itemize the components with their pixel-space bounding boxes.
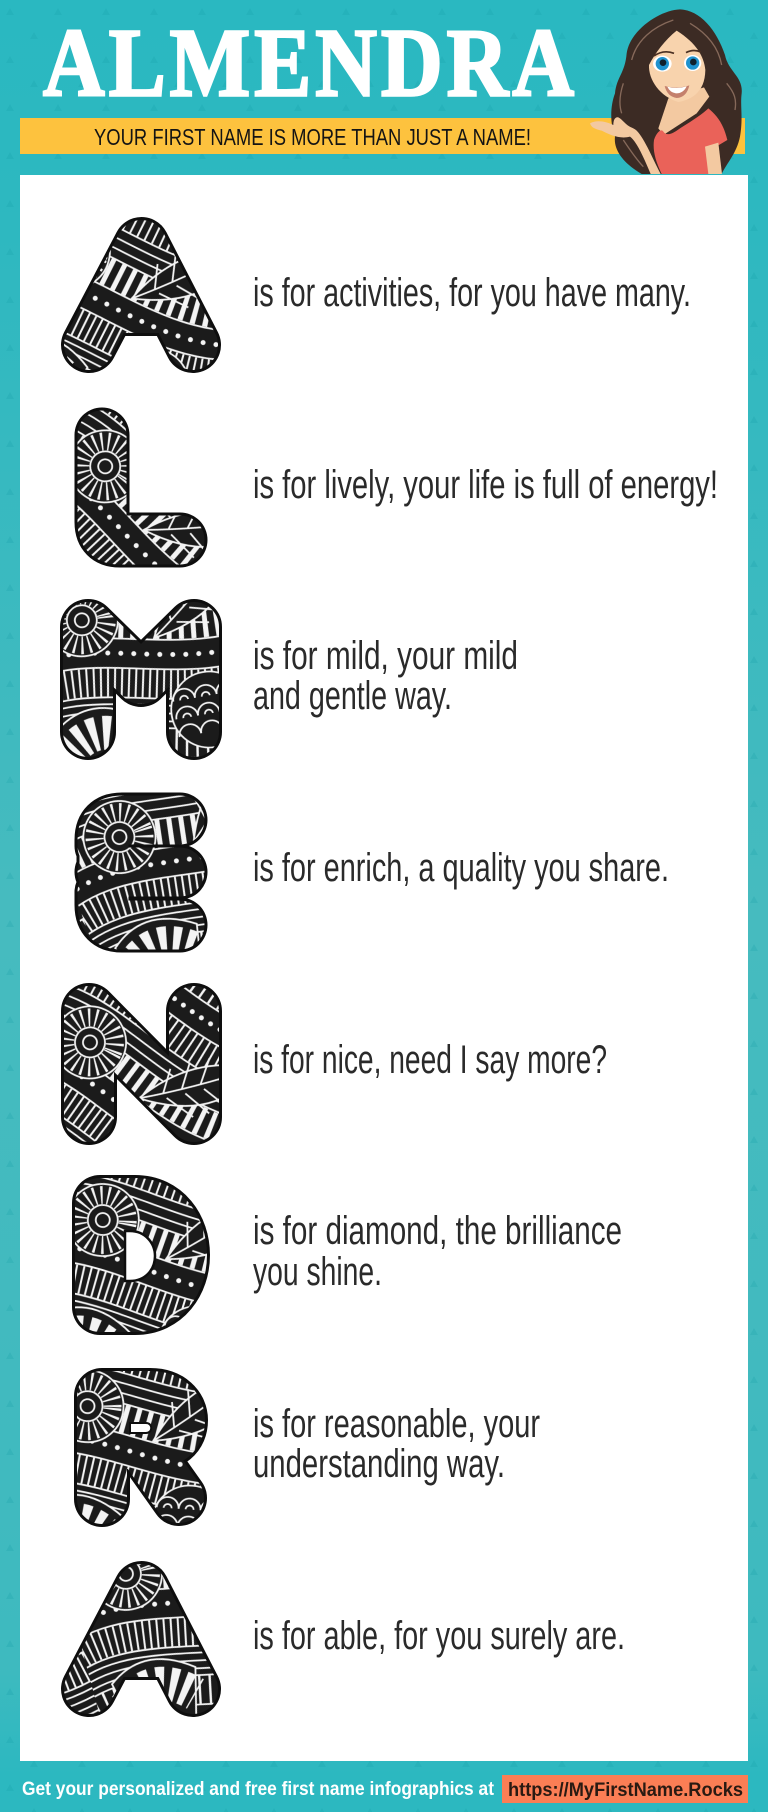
icon: cartoon woman bbox=[590, 9, 742, 174]
letter A row: A bbox=[83, 198, 199, 392]
letter N row: is for nice, need I say more? bbox=[253, 1038, 607, 1082]
letter N row: N bbox=[79, 966, 203, 1160]
subtitle banner bbox=[20, 118, 745, 154]
letter R row: R bbox=[79, 1350, 203, 1544]
letter N row bbox=[61, 983, 606, 1145]
left arm and hand bbox=[590, 117, 661, 174]
letter L row bbox=[74, 408, 716, 568]
letter M row bbox=[60, 599, 516, 760]
letter A row (last): A bbox=[83, 1542, 199, 1736]
letter A row bbox=[61, 217, 688, 373]
letter M row: M bbox=[69, 582, 213, 776]
letter N row: N bbox=[79, 966, 203, 1160]
footer call to action: Get your personalized and free first name infographics at bbox=[22, 1779, 495, 1800]
letter A row (last): A bbox=[83, 1542, 199, 1736]
letter R row bbox=[74, 1368, 540, 1527]
letter D row: you shine. bbox=[253, 1250, 382, 1294]
letter L row: L bbox=[90, 390, 186, 584]
right arm bbox=[705, 143, 722, 174]
letter A row (last): is for able, for you surely are. bbox=[253, 1614, 625, 1658]
title: ALMENDRA bbox=[43, 10, 578, 117]
mouth bbox=[665, 85, 689, 98]
eyes bbox=[653, 56, 672, 72]
letter M row: is for mild, your mild bbox=[253, 634, 518, 678]
shirt bbox=[654, 108, 727, 174]
letter E row: E bbox=[83, 774, 199, 968]
letter A row: A bbox=[83, 198, 199, 392]
letter D row: is for diamond, the brilliance bbox=[253, 1209, 622, 1253]
letter M row: M bbox=[69, 582, 213, 776]
letter A row (last) bbox=[61, 1561, 622, 1717]
letter R row: is for reasonable, your bbox=[253, 1402, 540, 1446]
face bbox=[649, 31, 705, 102]
letter L row: L bbox=[90, 390, 186, 584]
letter D row: D bbox=[79, 1158, 203, 1352]
letter D row bbox=[72, 1175, 621, 1335]
letter R row: understanding way. bbox=[253, 1442, 505, 1486]
letter E row: E bbox=[83, 774, 199, 968]
letter E row bbox=[74, 792, 666, 952]
footer url badge: https://MyFirstName.Rocks bbox=[508, 1780, 743, 1801]
letter M row: and gentle way. bbox=[253, 674, 452, 718]
hair bbox=[611, 9, 742, 174]
neck and chest bbox=[658, 87, 709, 135]
letter R row: R bbox=[79, 1350, 203, 1544]
letter D row: D bbox=[79, 1158, 203, 1352]
subtitle banner: YOUR FIRST NAME IS MORE THAN JUST A NAME! bbox=[94, 124, 531, 150]
eyebrows bbox=[654, 50, 701, 56]
